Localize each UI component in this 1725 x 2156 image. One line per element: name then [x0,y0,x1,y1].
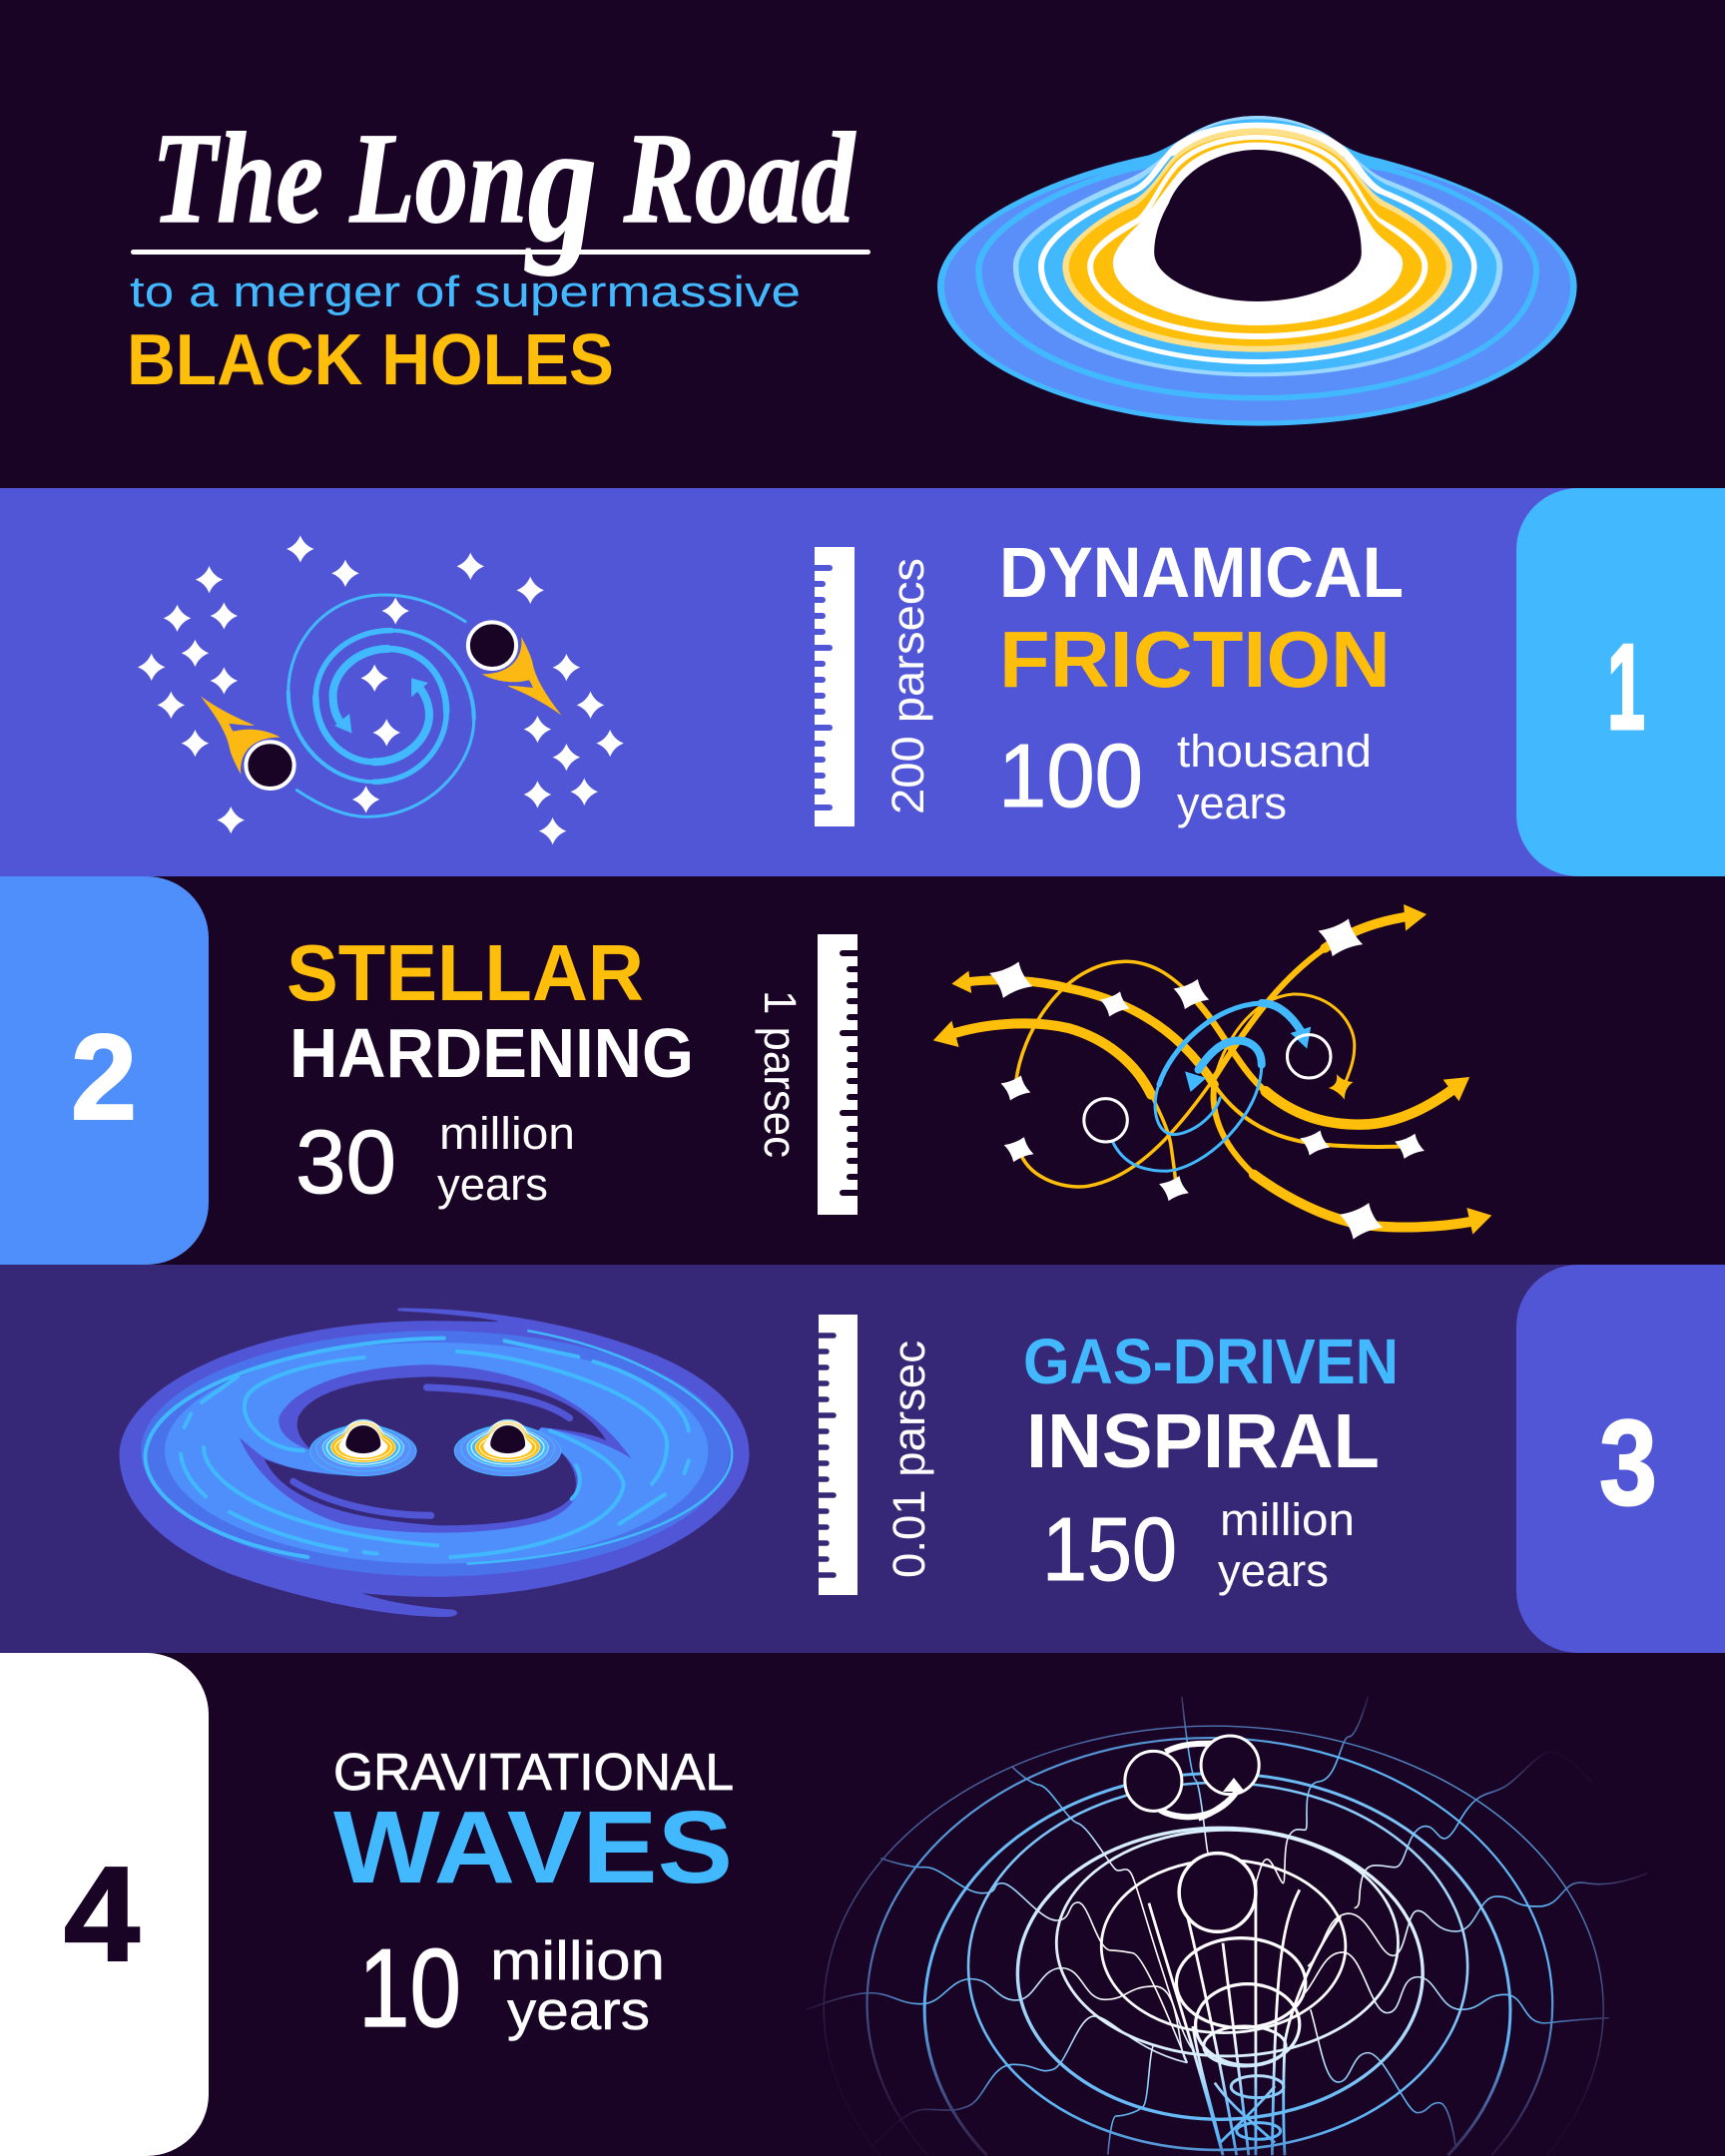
ruler: 200 parsecs [811,547,855,826]
illustration: stars scattered by binary [933,904,1491,1246]
number tab 4 [0,1653,209,2156]
band background [0,1265,1725,1653]
binary black hole left [1125,1751,1182,1811]
heading line 2: INSPIRAL [1026,1398,1380,1484]
illustration: gravitational wave funnel [807,1697,1647,2155]
panel: header [127,89,1577,426]
panel: 3 gas-driven inspiral [0,1265,1725,1653]
number 4: 4 [64,1839,140,1989]
duration unit line 2: years [1177,778,1287,828]
number tab 2 [0,876,209,1265]
illustration: black hole disk [937,116,1577,426]
duration unit line 2: years [437,1159,548,1210]
title: g [524,89,597,276]
panel: 1 dynamical friction [0,488,1725,876]
duration number: 10 [358,1926,461,2050]
heading line 1: GRAVITATIONAL [333,1744,734,1802]
duration unit line 2: years [1218,1545,1329,1596]
title rule [131,250,870,255]
ruler: 0.01 parsec [815,1315,858,1595]
title: Road [597,107,857,251]
duration unit line 2: years [507,1979,650,2041]
heading line 1: DYNAMICAL [999,534,1404,613]
orbit arrow [1160,1744,1237,1817]
duration unit line 1: million [1220,1494,1355,1545]
heading line 1: GAS-DRIVEN [1023,1326,1399,1397]
heading line 2: FRICTION [999,615,1391,704]
binary black hole right [1201,1736,1259,1795]
illustration: gas disk with two black holes [120,1308,750,1617]
heading line 2: HARDENING [289,1014,694,1092]
ruler: 1 parsec [818,934,862,1215]
heading line 1: STELLAR [287,928,644,1017]
band background [0,1653,1725,2156]
duration unit line 1: million [490,1929,665,1991]
merged black hole [1179,1854,1256,1931]
mini black hole left [309,1419,417,1476]
duration unit line 1: thousand [1177,726,1372,777]
duration number: 150 [1042,1500,1177,1600]
number 2: 2 [71,1009,137,1145]
number 1: 1 [1607,619,1645,755]
mini black hole right [454,1419,561,1476]
number 3: 3 [1599,1394,1657,1530]
scale label: 1 parsec [755,990,806,1158]
band background [0,488,1725,876]
scale label: 200 parsecs [882,558,933,814]
scale label: 0.01 parsec [883,1341,934,1578]
arrowhead [1223,1778,1245,1792]
duration number: 30 [295,1113,396,1213]
number tab 3 [1516,1265,1725,1653]
heading line 2: WAVES [333,1790,733,1904]
title: The Lon [152,107,610,251]
panel: 2 stellar hardening [0,876,1725,1265]
panel: 4 gravitational waves [0,1653,1725,2156]
band background [0,876,1725,1265]
duration unit line 1: million [439,1108,575,1159]
number tab 1 [1516,488,1725,876]
duration number: 100 [998,727,1143,826]
illustration: stars and spiralling black holes [138,535,624,844]
subtitle: to a merger of supermassive [130,268,801,316]
heading: black holes: BLACK HOLES [127,320,614,400]
